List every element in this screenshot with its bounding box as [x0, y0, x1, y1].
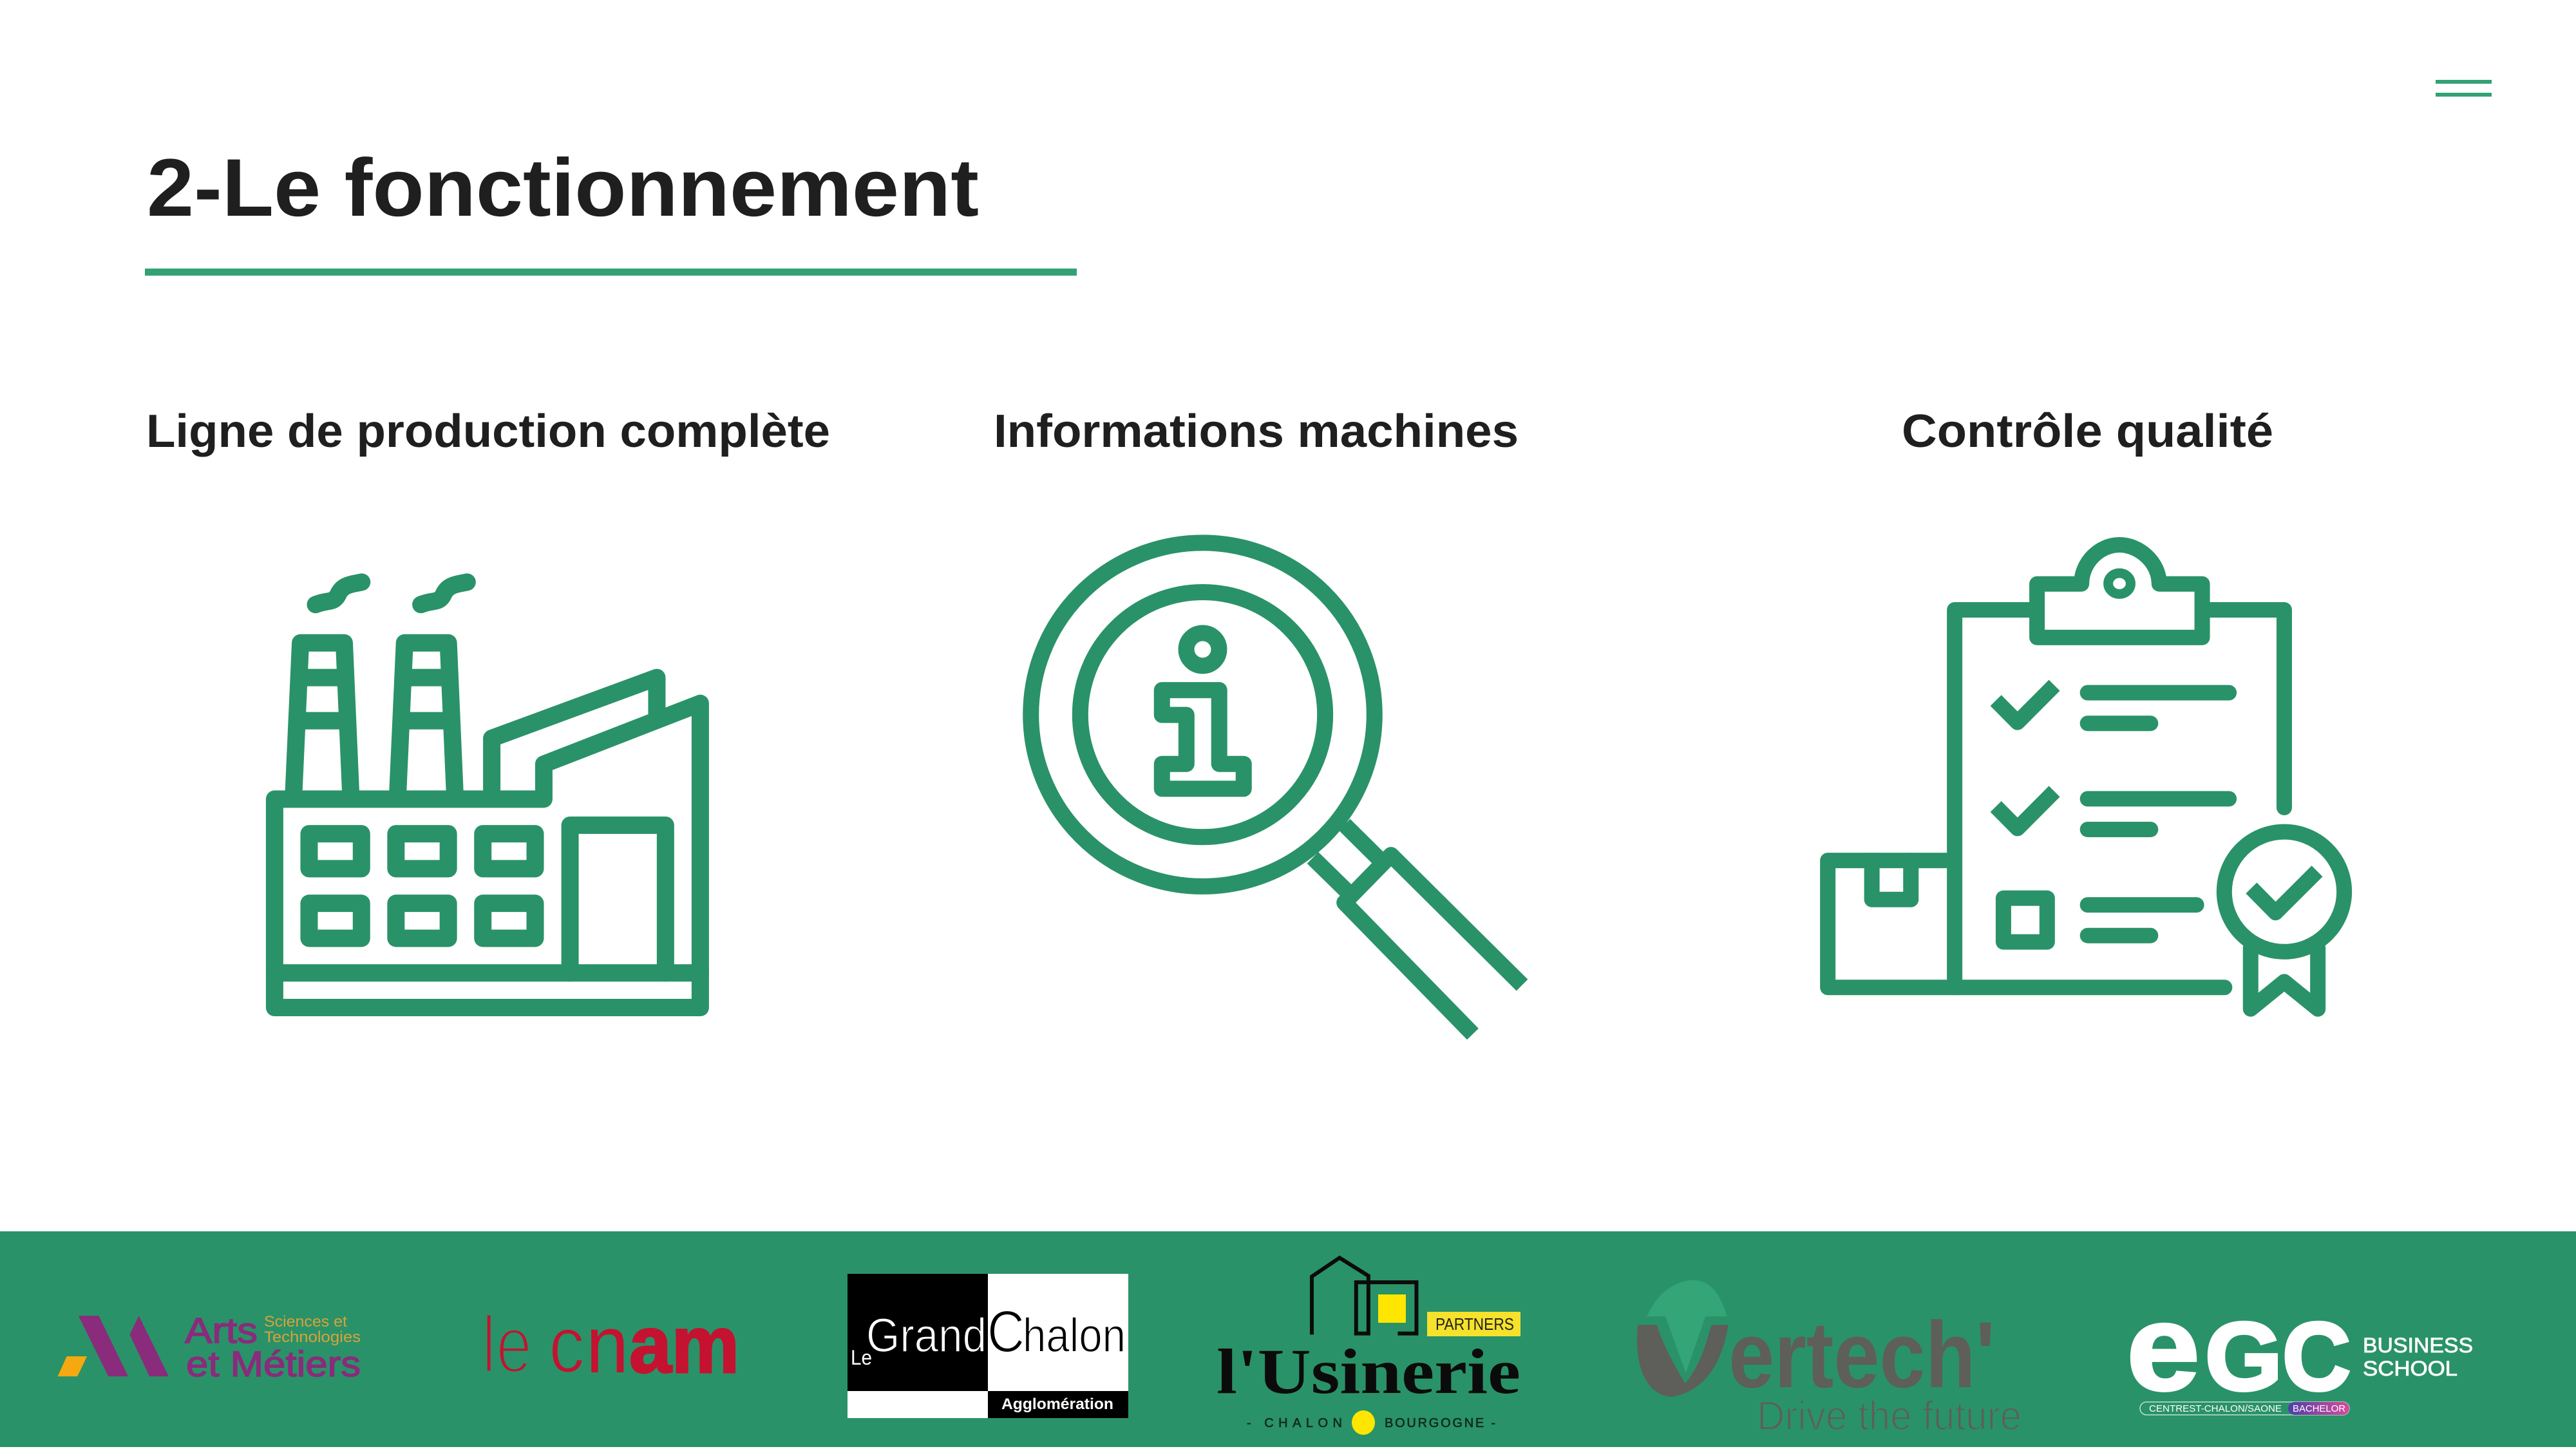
logo: l'Usinerie Partners: [1217, 1258, 1520, 1435]
heading: machine information: Informations machines: [994, 406, 1519, 457]
logo: EGC Business School: C: [2282, 1302, 2351, 1410]
logo: EGC Business School: BUSINESS: [2363, 1334, 2473, 1357]
heading: production line: Ligne de production complète: [146, 406, 830, 457]
logo: Arts et Métiers: et Métiers: [186, 1343, 361, 1384]
heading: quality control: Contrôle qualité: [1902, 406, 2273, 457]
title underline: [145, 269, 1077, 276]
logo: le cnam: am: [629, 1300, 739, 1390]
logo: le cnam: [482, 1300, 739, 1390]
logo: l'Usinerie Partners: BOURGOGNE -: [1385, 1416, 1495, 1430]
icon: magnifier with info symbol: [1031, 543, 1522, 1034]
menu icon: [2436, 80, 2492, 97]
logo: le cnam: n: [586, 1300, 629, 1390]
logo: le cnam: c: [549, 1300, 585, 1390]
logo: EGC Business School: BACHELOR: [2293, 1403, 2345, 1414]
logo: Le Grand Chalon: Le: [851, 1346, 872, 1369]
logo: EGC Business School: CENTREST-CHALON/SAONE: [2149, 1403, 2282, 1414]
logo: Le Grand Chalon: Grand: [866, 1309, 987, 1362]
logo: Vertech: [1637, 1280, 2022, 1439]
logo: Vertech: ertech': [1728, 1302, 1995, 1407]
logo: le cnam: le: [482, 1300, 532, 1390]
logo: EGC Business School: [2126, 1280, 2473, 1416]
logo: l'Usinerie Partners: PARTNERS: [1435, 1314, 1514, 1334]
logo: Le Grand Chalon: Agglomération: [1001, 1396, 1113, 1413]
title: 2-Le fonctionnement: [147, 142, 979, 233]
logo: Arts et Métiers: Arts: [185, 1310, 258, 1350]
logo: l'Usinerie Partners: - CHALON: [1247, 1416, 1342, 1430]
logo: l'Usinerie Partners: l'Usinerie: [1217, 1336, 1520, 1407]
logo: Arts et Métiers: [58, 1310, 361, 1384]
logo: EGC Business School: SCHOOL: [2363, 1357, 2458, 1380]
logo: Arts et Métiers: Sciences et: [264, 1313, 347, 1331]
logo: Le Grand Chalon: C: [987, 1299, 1025, 1365]
logo: EGC Business School: e: [2126, 1280, 2200, 1416]
logo: EGC Business School: G: [2205, 1302, 2282, 1410]
logo: Le Grand Chalon: [848, 1274, 1128, 1418]
icon: factory: [274, 582, 700, 1008]
logo: Vertech: Drive the future: [1757, 1394, 2022, 1439]
logo: Arts et Métiers: Technologies: [264, 1329, 361, 1346]
logo: Le Grand Chalon: halon: [1023, 1309, 1126, 1362]
icon: quality checklist: [1828, 545, 2344, 1009]
footer band: [0, 1231, 2576, 1447]
